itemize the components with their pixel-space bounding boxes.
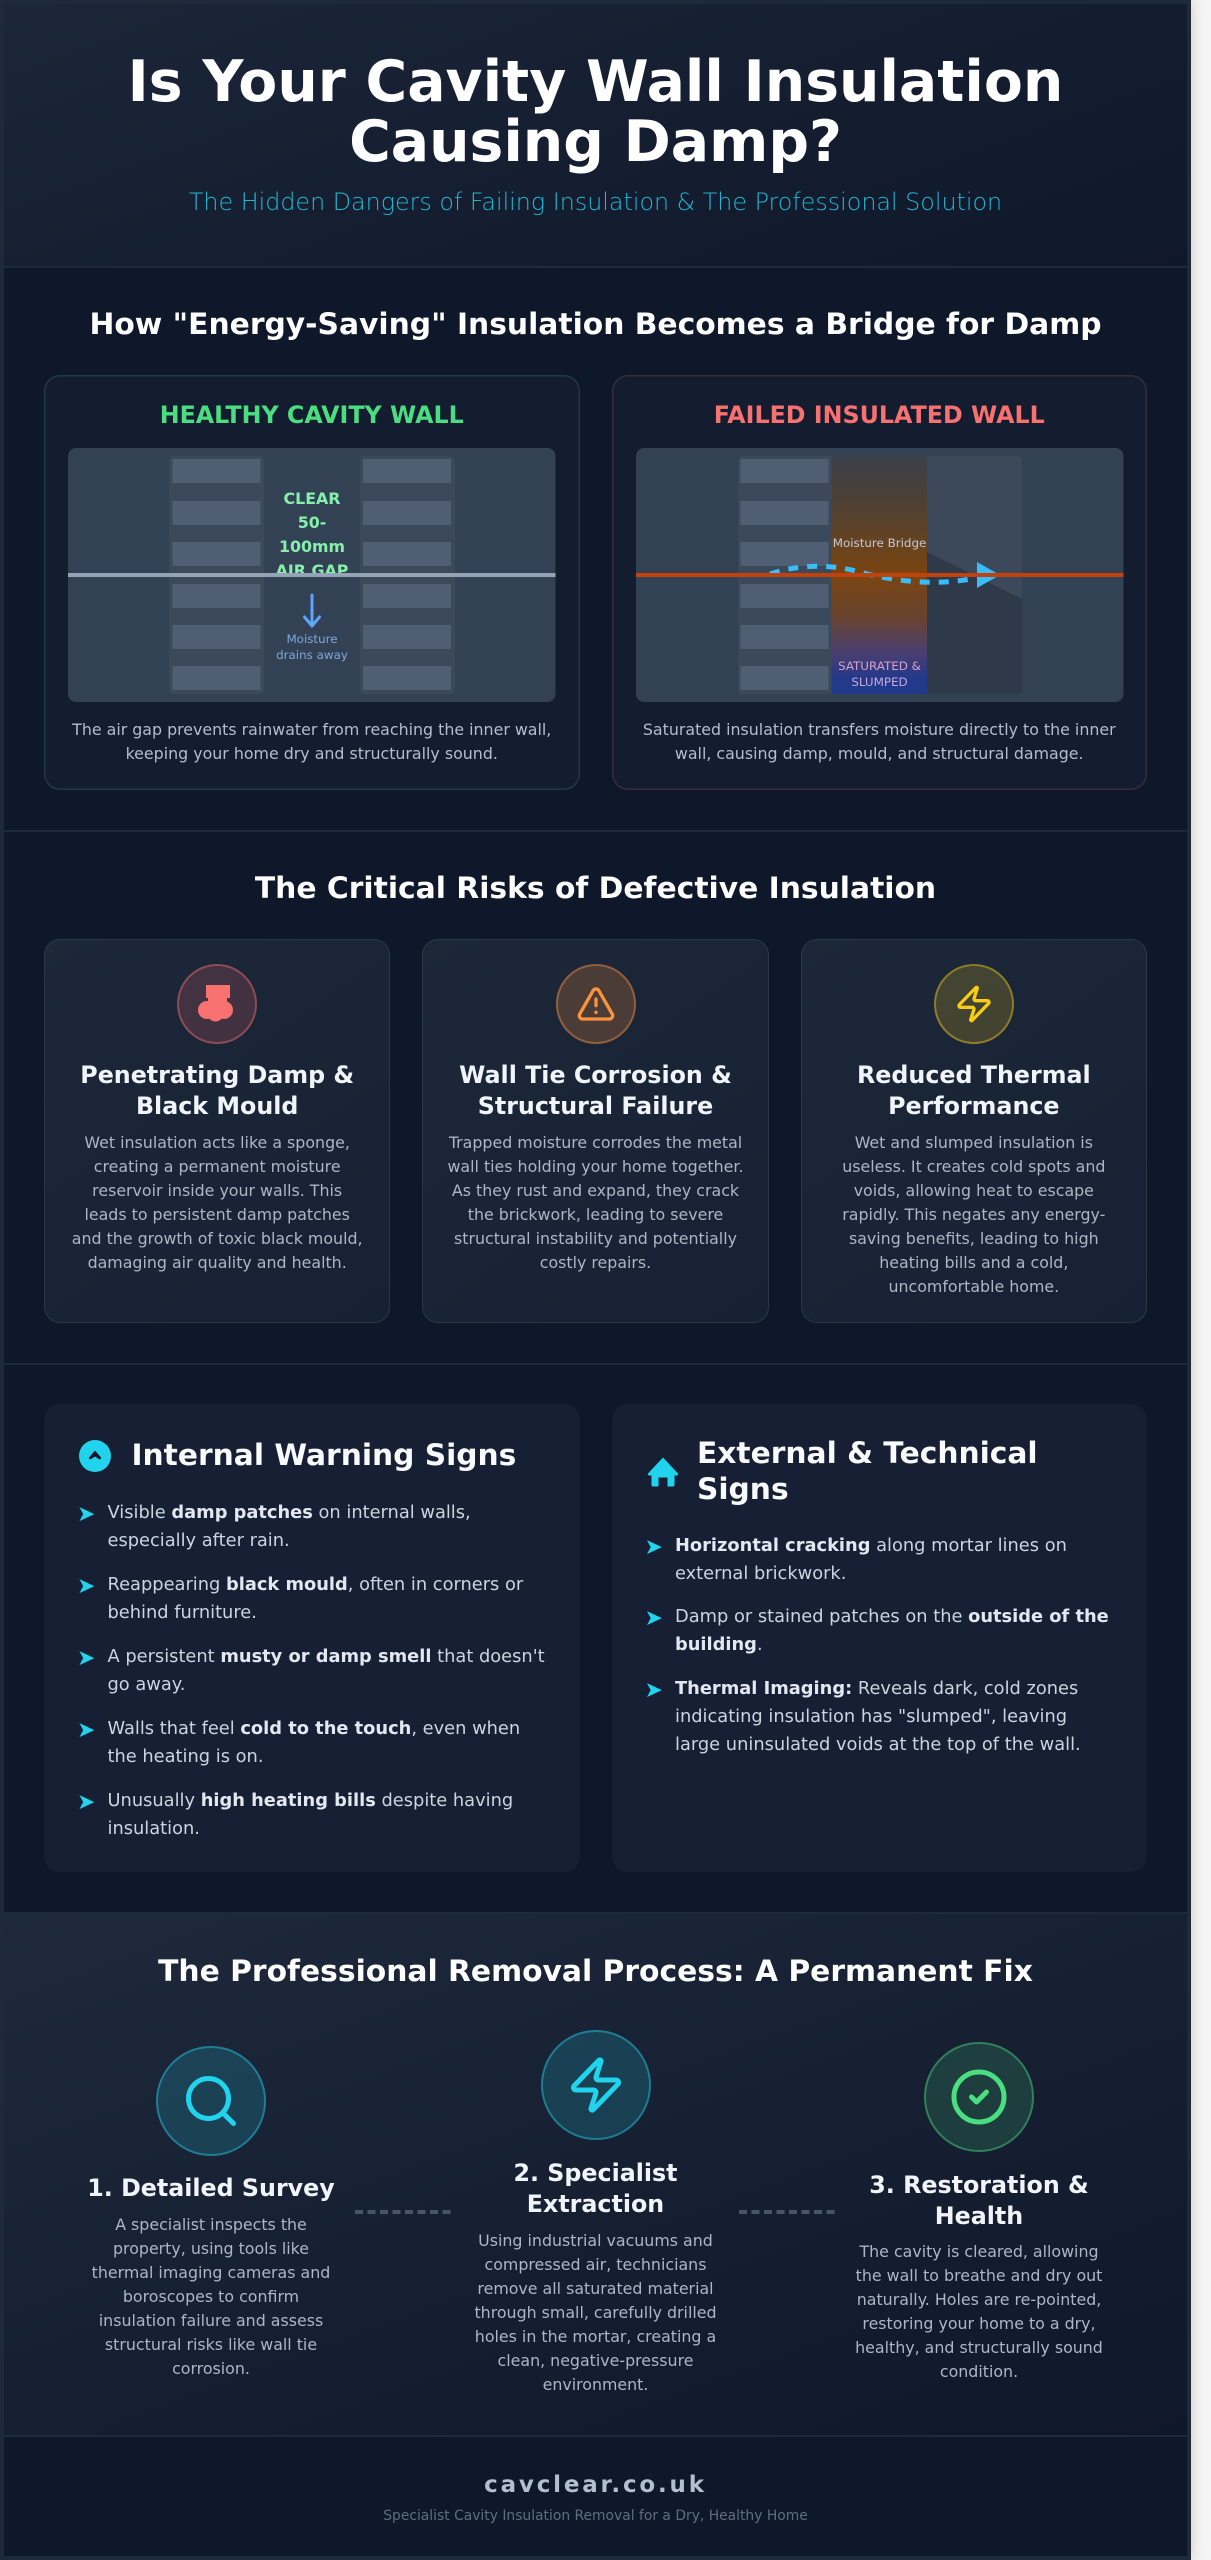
icon: lightning bolt [934, 964, 1014, 1044]
panel: internal warning signs [44, 1404, 580, 1872]
text: thermal performance [842, 1133, 1105, 1296]
list: internal signs: Unusually high heating bills despite having [108, 1790, 513, 1811]
diagram: failed wall cross-section: SLUMPED [851, 675, 908, 689]
text: step 2: remove all saturated material [477, 2279, 714, 2298]
text: wall tie corrosion: structural instability and potentially [454, 1229, 737, 1248]
text: wall tie corrosion: costly repairs. [540, 1253, 651, 1272]
list: internal signs: ➤ [77, 1502, 95, 1527]
text: step 3: healthy, and structurally sound [855, 2338, 1103, 2357]
subtitle: The Hidden Dangers of Failing Insulation & The Professional Solution [189, 188, 1002, 216]
diagram: failed wall cross-section [636, 448, 1124, 702]
panel: external and technical signs [612, 1404, 1147, 1872]
diagram: failed wall cross-section: SATURATED & [838, 659, 921, 673]
list: external signs [644, 1535, 1109, 1755]
heading: penetrating damp: Black Mould [136, 1092, 298, 1120]
diagram: healthy wall cross-section: 50- [298, 513, 326, 532]
list: internal signs: ➤ [77, 1646, 95, 1671]
text: penetrating damp [72, 1133, 363, 1272]
header band [0, 0, 1191, 268]
text: step 1: structural risks like wall tie [105, 2335, 317, 2354]
icon: house [648, 1458, 678, 1486]
text: penetrating damp: Wet insulation acts like a sponge, [84, 1133, 350, 1152]
list: external signs: Damp or stained patches on the outside of the [675, 1606, 1109, 1627]
text: wall tie corrosion: As they rust and expand, they crack [452, 1181, 739, 1200]
icon: check circle [924, 2042, 1034, 2152]
caption: failed: Saturated insulation transfers moisture directly to the inner [643, 720, 1116, 738]
heading: bridge for damp: How "Energy-Saving" Insulation Becomes a Bridge for Damp [89, 307, 1102, 342]
card: wall tie corrosion [422, 939, 769, 1323]
text: wall tie corrosion: wall ties holding your home together. [447, 1157, 744, 1176]
text: step 1: A specialist inspects the [115, 2215, 307, 2234]
text: wall tie corrosion [447, 1133, 744, 1272]
heading: wall tie corrosion: Structural Failure [478, 1092, 713, 1120]
text: step 1: property, using tools like [113, 2239, 309, 2258]
icon: mould [177, 964, 257, 1044]
text: step 1: boroscopes to confirm [123, 2287, 299, 2306]
list: internal signs: Visible damp patches on internal walls, [108, 1502, 471, 1523]
footer brand: cavclear.co.uk [484, 2472, 707, 2498]
step 3: restoration [855, 2042, 1103, 2381]
list: internal signs: Walls that feel cold to the touch, even when [108, 1718, 520, 1739]
list: internal signs: Reappearing black mould, often in corners or [108, 1574, 523, 1595]
heading: step 2: 2. Specialist [513, 2158, 678, 2186]
panel title: healthy: HEALTHY CAVITY WALL [160, 401, 464, 429]
list: external signs: ➤ [644, 1535, 663, 1560]
text: penetrating damp: reservoir inside your walls. This [92, 1181, 342, 1200]
text: step 1: thermal imaging cameras and [92, 2263, 330, 2282]
text: step 3: condition. [940, 2362, 1018, 2381]
footer [0, 2437, 1191, 2560]
list: internal signs [77, 1502, 545, 1839]
heading: step 1: 1. Detailed Survey [87, 2174, 335, 2202]
text: thermal performance: useless. It creates cold spots and [842, 1157, 1105, 1176]
text: thermal performance: heating bills and a cold, [879, 1253, 1068, 1272]
icon: internal signs [79, 1440, 111, 1472]
heading: external signs: Signs [697, 1472, 789, 1507]
heading: external signs [697, 1436, 1038, 1507]
list: external signs: large uninsulated voids at the top of the wall. [675, 1734, 1081, 1755]
list: external signs: ➤ [644, 1606, 663, 1631]
list: internal signs: ➤ [77, 1718, 95, 1743]
heading: step 2: Extraction [527, 2190, 664, 2218]
list: internal signs: ➤ [77, 1574, 95, 1599]
text: thermal performance: rapidly. This negates any energy- [842, 1205, 1105, 1224]
caption: healthy: keeping your home dry and structurally sound. [126, 744, 498, 762]
text: thermal performance: Wet and slumped insulation is [855, 1133, 1093, 1152]
list: internal signs: A persistent musty or damp smell that doesn't [108, 1646, 545, 1667]
diagram: healthy wall cross-section: 100mm [279, 537, 345, 556]
list: external signs: external brickwork. [675, 1563, 846, 1584]
text: step 1 [92, 2215, 330, 2378]
text: step 3: The cavity is cleared, allowing [859, 2242, 1099, 2261]
diagram: failed wall cross-section: Moisture Bridge [833, 536, 926, 550]
text: step 3: restoring your home to a dry, [862, 2314, 1096, 2333]
caption: failed [643, 720, 1116, 762]
text: step 3: naturally. Holes are re-pointed, [857, 2290, 1101, 2309]
text: step 2: Using industrial vacuums and [478, 2231, 713, 2250]
heading: thermal performance [857, 1061, 1091, 1120]
list: external signs: indicating insulation has "slumped", leaving [675, 1706, 1067, 1727]
text: step 3 [855, 2242, 1103, 2381]
list: internal signs: behind furniture. [108, 1602, 257, 1623]
list: internal signs: go away. [108, 1674, 185, 1695]
caption: healthy [72, 720, 551, 762]
text: step 1: insulation failure and assess [99, 2311, 323, 2330]
heading: step 3 [869, 2170, 1089, 2230]
arrow: connector 1 to 2 [355, 2210, 450, 2214]
text: step 2: holes in the mortar, creating a [475, 2327, 716, 2346]
heading: wall tie corrosion [459, 1061, 732, 1120]
heading: penetrating damp: Penetrating Damp & [80, 1061, 354, 1089]
heading: step 2 [513, 2158, 678, 2218]
heading: step 3: 3. Restoration & [869, 2170, 1089, 2198]
card: thermal performance [801, 939, 1147, 1323]
heading: thermal performance: Reduced Thermal [857, 1061, 1091, 1089]
diagram: healthy wall cross-section [68, 448, 556, 702]
list: internal signs: the heating is on. [108, 1746, 264, 1767]
text: step 2: environment. [543, 2375, 648, 2394]
list: internal signs: especially after rain. [108, 1530, 290, 1551]
text: thermal performance: saving benefits, leading to high [849, 1229, 1099, 1248]
footer tagline: Specialist Cavity Insulation Removal for a Dry, Healthy Home [383, 2508, 808, 2524]
icon: magnifier [156, 2046, 266, 2156]
text: step 2: compressed air, technicians [485, 2255, 706, 2274]
text: wall tie corrosion: Trapped moisture corrodes the metal [449, 1133, 742, 1152]
title: Causing Damp? [349, 109, 842, 175]
text: penetrating damp: and the growth of toxic black mould, [72, 1229, 363, 1248]
heading: external signs: External & Technical [697, 1436, 1038, 1471]
diagram: healthy wall cross-section: Moisture [286, 632, 338, 646]
icon: warning triangle [556, 964, 636, 1044]
panel: failed insulated wall [612, 375, 1147, 790]
heading: internal signs: Internal Warning Signs [132, 1438, 516, 1473]
diagram: healthy wall cross-section: drains away [276, 648, 348, 662]
caption: healthy: The air gap prevents rainwater from reaching the inner wall, [72, 720, 551, 738]
title: Is Your Cavity Wall Insulation [128, 49, 1063, 115]
icon: lightning extraction [540, 2030, 650, 2140]
text: thermal performance: uncomfortable home. [888, 1277, 1059, 1296]
panel: removal process [0, 1912, 1191, 2437]
diagram: healthy wall cross-section: CLEAR [284, 489, 340, 508]
text: step 2: through small, carefully drilled [474, 2303, 717, 2322]
heading: thermal performance: Performance [888, 1092, 1060, 1120]
text: step 2 [474, 2231, 717, 2394]
step 1: survey [87, 2046, 335, 2378]
list: external signs: Horizontal cracking along mortar lines on [675, 1535, 1067, 1556]
text: thermal performance: voids, allowing heat to escape [854, 1181, 1094, 1200]
caption: failed: wall, causing damp, mould, and structural damage. [675, 744, 1084, 762]
text: penetrating damp: leads to persistent damp patches [84, 1205, 350, 1224]
list: external signs: building. [675, 1634, 763, 1655]
text: penetrating damp: damaging air quality and health. [88, 1253, 347, 1272]
panel title: failed: FAILED INSULATED WALL [714, 401, 1045, 429]
heading: removal process: The Professional Removal Process: A Permanent Fix [158, 1954, 1033, 1989]
list: external signs: Thermal Imaging: Reveals dark, cold zones [675, 1678, 1078, 1699]
text: step 3: the wall to breathe and dry out [856, 2266, 1102, 2285]
title [128, 49, 1063, 175]
list: external signs: ➤ [644, 1678, 663, 1703]
diagram: healthy wall cross-section: AIR GAP [276, 561, 348, 580]
heading: step 3: Health [935, 2202, 1023, 2230]
text: step 2: clean, negative-pressure [498, 2351, 693, 2370]
list: internal signs: insulation. [108, 1818, 200, 1839]
step 2: extraction [474, 2030, 717, 2394]
card: penetrating damp [44, 939, 390, 1323]
panel: healthy cavity wall [44, 375, 580, 790]
text: penetrating damp: creating a permanent moisture [94, 1157, 341, 1176]
heading: penetrating damp [80, 1061, 354, 1120]
heading: critical risks: The Critical Risks of Defective Insulation [255, 871, 936, 906]
list: internal signs: ➤ [77, 1790, 95, 1815]
text: step 1: corrosion. [172, 2359, 250, 2378]
heading: wall tie corrosion: Wall Tie Corrosion & [459, 1061, 732, 1089]
text: wall tie corrosion: the brickwork, leading to severe [468, 1205, 723, 1224]
arrow: connector 2 to 3 [739, 2210, 834, 2214]
